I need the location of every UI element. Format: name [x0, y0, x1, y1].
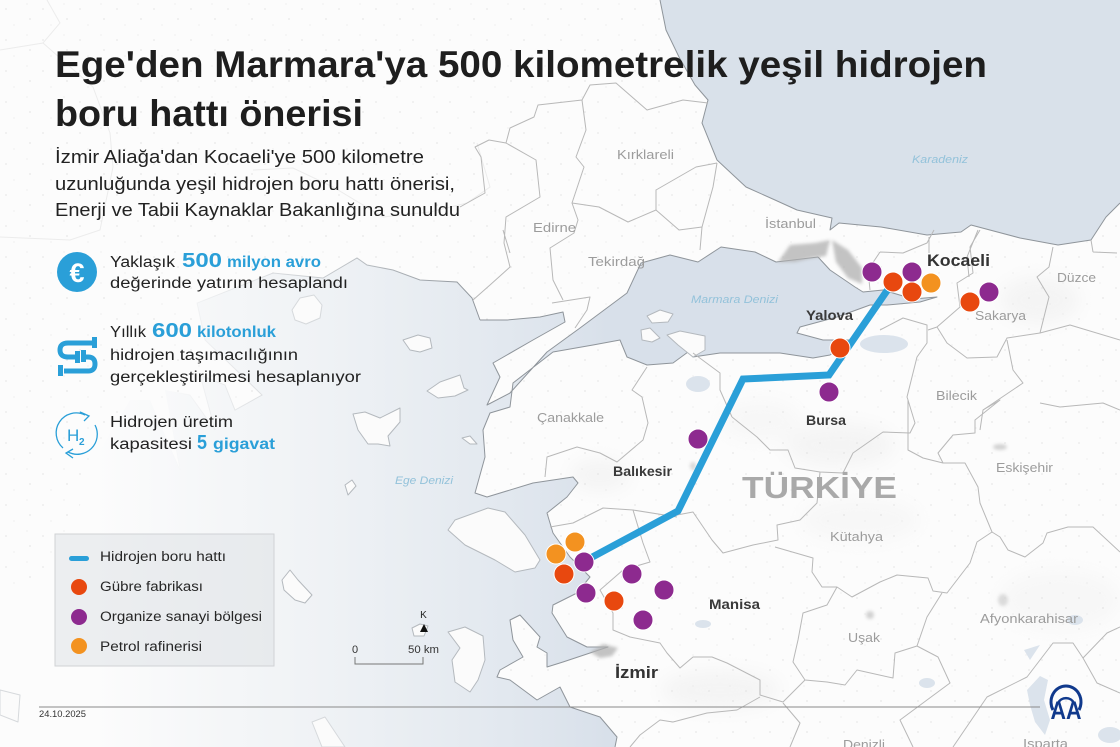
- facility markers: oil refineries: [546, 273, 941, 564]
- map labels: provinces: Afyonkarahisar: [980, 612, 1078, 626]
- map labels: provinces: Edirne: [533, 221, 576, 235]
- map labels: project provinces: Bursa: [806, 413, 847, 428]
- text: transport: 600: [152, 320, 192, 342]
- subtitle: Enerji ve Tabii Kaynaklar Bakanlığına sunuldu: [55, 200, 460, 220]
- subtitle: İzmir Aliağa'dan Kocaeli'ye 500 kilometre: [55, 147, 424, 167]
- legend: fertilizer plant: Gübre fabrikası: [100, 579, 203, 594]
- map labels: provinces: [533, 148, 1096, 747]
- subtitle: uzunluğunda yeşil hidrojen boru hattı önerisi,: [55, 174, 455, 194]
- map labels: project provinces: İzmir: [615, 664, 659, 682]
- legend: oil refinery: [71, 638, 202, 654]
- map labels: provinces: İstanbul: [765, 217, 816, 231]
- footer line: [39, 706, 1040, 708]
- lakes: [686, 335, 1120, 743]
- country label: TÜRKİYE: [742, 470, 897, 505]
- title: Ege'den Marmara'ya 500 kilometrelik yeşil hidrojen: [55, 44, 987, 85]
- legend: [55, 534, 274, 666]
- legend: pipeline: Hidrojen boru hattı: [100, 549, 226, 564]
- map labels: project provinces: Kocaeli: [927, 252, 990, 270]
- map labels: provinces: Kütahya: [830, 530, 883, 544]
- text: capacity: [110, 414, 275, 454]
- text: capacity: Hidrojen üretim: [110, 414, 233, 431]
- facility marker: pipeline start: [574, 552, 594, 572]
- text: capacity: gigavat: [213, 436, 275, 453]
- map labels: provinces: Çanakkale: [537, 411, 604, 425]
- map labels: provinces: Eskişehir: [996, 461, 1053, 475]
- scale bar: 0: [352, 644, 358, 656]
- map labels: seas: Ege Denizi: [395, 475, 454, 487]
- map labels: provinces: Uşak: [848, 631, 881, 645]
- map labels: seas: Karadeniz: [912, 154, 969, 166]
- legend: fertilizer plant: [71, 579, 203, 595]
- map labels: project provinces: Balıkesir: [613, 464, 673, 479]
- logo: AA: AA: [1050, 697, 1082, 725]
- sea: Marmara and Aegean: [0, 247, 937, 747]
- facility markers: organized industrial zones: [576, 262, 999, 630]
- scale bar: [352, 644, 439, 664]
- urban areas: [590, 240, 1008, 658]
- map labels: provinces: Sakarya: [975, 309, 1026, 323]
- map labels: provinces: Kırklareli: [617, 148, 674, 162]
- text: investment: milyon avro: [227, 254, 321, 271]
- islands: [0, 295, 705, 747]
- sea: Black Sea: [660, 0, 1120, 245]
- map labels: seas: [395, 154, 969, 487]
- legend: organized industrial zone: Organize sanayi bölgesi: [100, 609, 262, 624]
- text: transport: gerçekleştirilmesi hesaplanıyor: [110, 369, 361, 386]
- map labels: provinces: Tekirdağ: [588, 255, 645, 269]
- title: [55, 44, 987, 134]
- map labels: seas: Marmara Denizi: [691, 294, 779, 306]
- icon: hydrogen: H: [67, 426, 79, 445]
- text: transport: Yıllık: [110, 324, 146, 341]
- text: capacity: kapasitesi: [110, 436, 192, 453]
- text: capacity: 5: [197, 432, 207, 454]
- text: transport: kilotonluk: [197, 324, 276, 341]
- text: investment: [110, 250, 348, 292]
- text: investment: Yaklaşık: [110, 254, 175, 271]
- facility markers: fertilizer plants: [554, 272, 980, 611]
- map labels: provinces: Düzce: [1057, 271, 1096, 285]
- date: 24.10.2025: [39, 709, 86, 720]
- map labels: project provinces: Yalova: [806, 308, 854, 323]
- text: transport: hidrojen taşımacılığının: [110, 347, 298, 364]
- logo: AA: [1050, 686, 1082, 725]
- icon: euro: [57, 252, 97, 292]
- icon: pipe: [58, 337, 97, 376]
- icon: hydrogen: [56, 412, 97, 458]
- pipeline: [585, 282, 893, 561]
- map labels: project provinces: Manisa: [709, 597, 761, 612]
- icon: hydrogen: 2: [79, 437, 85, 448]
- title: boru hattı önerisi: [55, 93, 363, 134]
- north arrow: [420, 610, 428, 632]
- map labels: provinces: Bilecik: [936, 389, 978, 403]
- subtitle: [55, 147, 460, 220]
- map labels: project provinces: [613, 252, 990, 682]
- text: investment: 500: [182, 250, 222, 272]
- legend: oil refinery: Petrol rafinerisi: [100, 639, 202, 654]
- text: investment: değerinde yatırım hesaplandı: [110, 275, 348, 292]
- icon: euro: €: [69, 258, 85, 288]
- text: transport: [110, 320, 361, 386]
- scale bar: 50 km: [408, 644, 439, 656]
- north arrow: K: [420, 610, 427, 621]
